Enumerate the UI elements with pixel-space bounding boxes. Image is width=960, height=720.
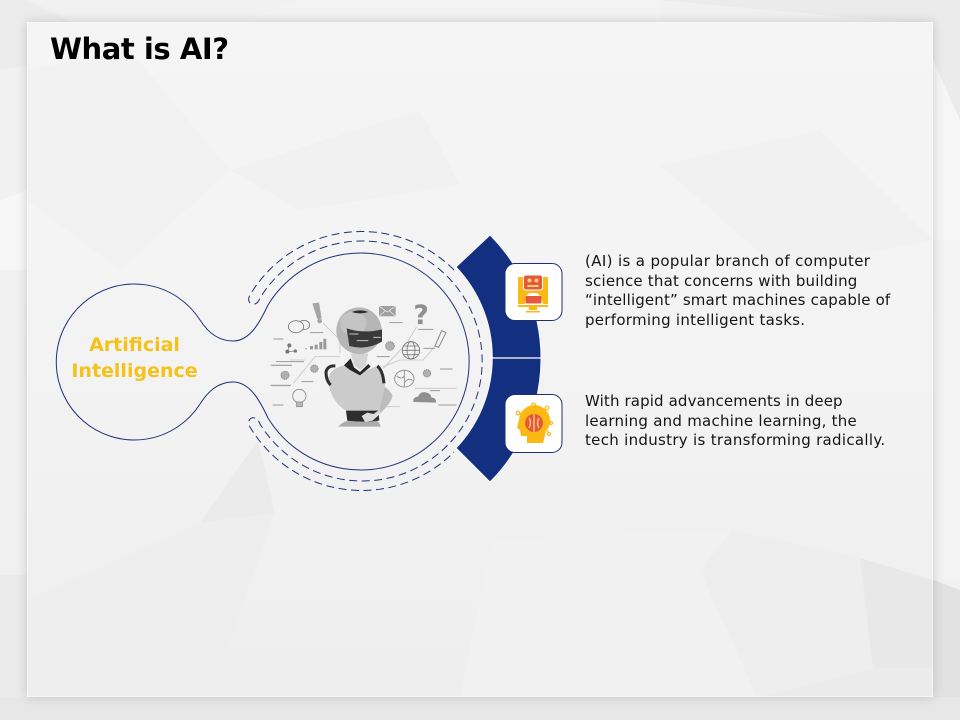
visor detail — [349, 334, 381, 341]
bar chart icon — [305, 339, 326, 349]
light bulb icon — [293, 389, 306, 407]
text block: advancements — [585, 392, 885, 449]
robot wrist cuff — [362, 410, 381, 422]
text block: definition — [585, 252, 890, 329]
gears — [281, 342, 431, 379]
text block: definition: (AI) is a popular branch of computer — [585, 252, 870, 270]
head top cap — [352, 310, 368, 313]
pencil icon — [435, 331, 446, 347]
dashed ring — [249, 232, 482, 490]
robot illustration — [270, 300, 457, 427]
robot neck — [351, 353, 368, 370]
label: Artificial Intelligence: Intelligence — [71, 360, 198, 382]
robot base — [338, 420, 381, 427]
robot torso — [328, 365, 385, 411]
question mark icon: ? — [413, 300, 429, 331]
robot head — [523, 274, 543, 290]
keyhole outline — [56, 253, 469, 470]
brain icon — [395, 370, 414, 387]
text block: definition: science that concerns with building — [585, 272, 858, 290]
network nodes icon — [286, 344, 297, 353]
label: Artificial Intelligence: Artificial — [89, 334, 180, 356]
head highlight — [340, 312, 367, 335]
brain — [525, 414, 543, 432]
text block: advancements: learning and machine learning, the — [585, 412, 857, 430]
monitor — [518, 277, 548, 304]
text block: advancements: With rapid advancements in deep — [585, 392, 843, 410]
robot right arm — [375, 385, 393, 414]
robot shoulders — [326, 366, 384, 385]
icon box: brain head — [505, 394, 562, 452]
robot waist — [346, 411, 379, 422]
robot head — [336, 307, 382, 354]
globe icon — [402, 342, 420, 359]
cloud icon — [413, 392, 436, 403]
text block: advancements: tech industry is transforming radically. — [585, 431, 885, 449]
text block: definition: performing intelligent tasks. — [585, 311, 805, 329]
label: Artificial Intelligence — [71, 334, 198, 382]
robot body — [525, 293, 543, 304]
circuit lines — [270, 323, 457, 407]
robot collar — [344, 358, 371, 375]
exclamation icon — [312, 303, 322, 323]
robot visor — [347, 328, 382, 348]
circuit nodes — [516, 403, 552, 436]
icon box: robot monitor — [505, 264, 562, 320]
small dashes — [271, 323, 457, 405]
text block: definition: “intelligent” smart machines capable of — [585, 291, 890, 309]
envelope icon — [379, 306, 396, 316]
robot eyes — [528, 278, 538, 287]
head silhouette — [517, 405, 550, 443]
blue arc segment — [456, 235, 541, 482]
monitor stand — [518, 305, 548, 312]
segment divider — [490, 357, 541, 359]
speech bubbles icon — [288, 320, 310, 333]
title: What is AI? — [50, 32, 229, 66]
